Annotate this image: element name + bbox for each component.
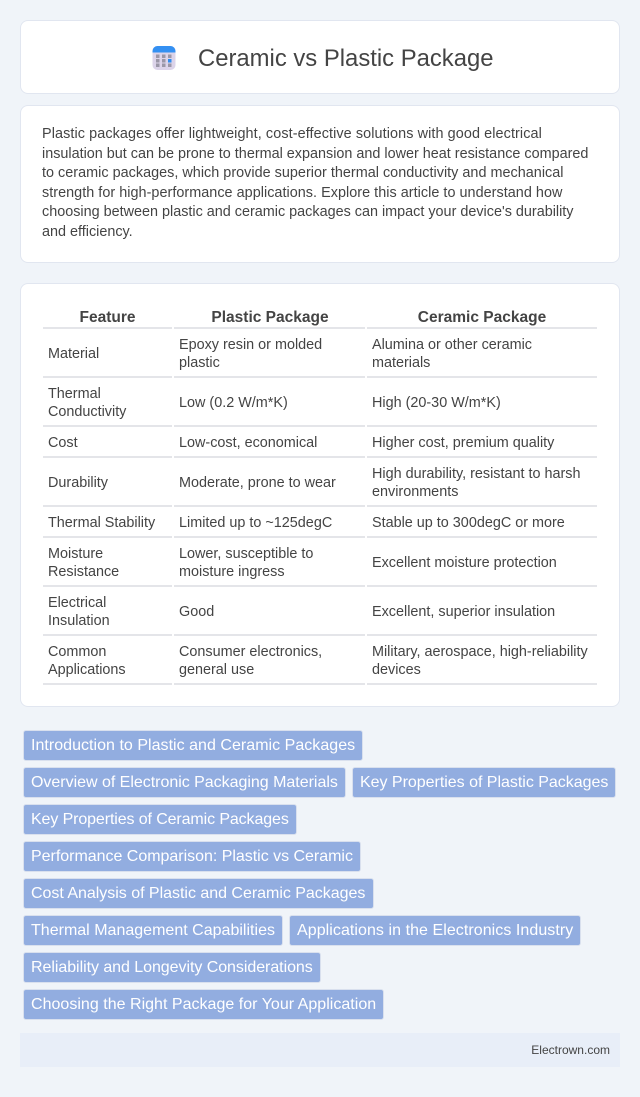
row: material: Epoxy resin or molded [179, 337, 322, 353]
row: electrical insulation: Excellent, superior insulation [372, 604, 555, 620]
footer credit: Electrown.com [531, 1043, 610, 1057]
row: moisture resistance: Resistance [48, 564, 119, 580]
tag: thermal: Thermal Management Capabilities [31, 922, 275, 939]
tag: plastic properties: Key Properties of Plastic Packages [360, 774, 608, 791]
row: material: plastic [179, 355, 220, 371]
row: material [48, 337, 532, 371]
row: common applications: Military, aerospace, high-reliability [372, 644, 588, 660]
tag: introduction: Introduction to Plastic and Ceramic Packages [31, 737, 355, 754]
tag: applications: Applications in the Electronics Industry [297, 922, 573, 939]
tag: plastic properties [352, 767, 616, 798]
tag: overview: Overview of Electronic Packaging Materials [31, 774, 338, 791]
column headers: Plastic Package [211, 309, 329, 326]
intro text: to ceramic packages, which provide superior thermal conductivity and mechanical [42, 165, 564, 181]
row: durability: Durability [48, 475, 108, 491]
intro text: strength for high-performance applications. Explore this article to understand how [42, 184, 562, 200]
row: durability: High durability, resistant to harsh [372, 466, 580, 482]
title: Ceramic vs Plastic Package [198, 45, 494, 72]
row: thermal stability: Thermal Stability [48, 515, 155, 531]
tag: ceramic properties: Key Properties of Ceramic Packages [31, 811, 289, 828]
tag: performance [23, 841, 361, 872]
row: cost [48, 435, 554, 451]
tag: choosing: Choosing the Right Package for Your Application [31, 996, 376, 1013]
row: durability: Moderate, prone to wear [179, 475, 336, 491]
row: electrical insulation: Good [179, 604, 214, 620]
tag: performance: Performance Comparison: Plastic vs Ceramic [31, 848, 353, 865]
intro text: choosing between plastic and ceramic packages can impact your device's durability [42, 204, 573, 220]
row: common applications [48, 644, 588, 678]
row: thermal stability [48, 515, 565, 531]
row: cost: Cost [48, 435, 78, 451]
row: thermal conductivity: High (20-30 W/m*K) [372, 395, 501, 411]
row: common applications: Common [48, 644, 106, 660]
row: thermal stability: Limited up to ~125degC [179, 515, 332, 531]
tag: reliability [23, 952, 321, 983]
tag: introduction [23, 730, 363, 761]
intro text [42, 126, 588, 240]
row: electrical insulation: Insulation [48, 613, 110, 629]
header panel [20, 20, 620, 94]
column headers: Feature [80, 309, 136, 326]
intro text: insulation but can be prone to thermal expansion and lower heat resistance compared [42, 146, 588, 162]
row: moisture resistance: Moisture [48, 546, 103, 562]
tag: applications [289, 915, 581, 946]
tag: reliability: Reliability and Longevity Considerations [31, 959, 313, 976]
intro text: Plastic packages offer lightweight, cost-effective solutions with good electrical [42, 126, 542, 142]
row: material: Material [48, 346, 99, 362]
column headers [80, 309, 546, 326]
tag list [23, 730, 616, 1020]
tag: overview [23, 767, 346, 798]
icon: calendar [152, 46, 176, 70]
panel: introduction [20, 105, 620, 263]
footer [20, 1033, 620, 1067]
row: durability: environments [372, 484, 458, 500]
row: electrical insulation [48, 595, 555, 629]
row: durability [48, 466, 580, 500]
tag: ceramic properties [23, 804, 297, 835]
row: common applications: Applications [48, 662, 126, 678]
row: moisture resistance: moisture ingress [179, 564, 285, 580]
row: material: materials [372, 355, 430, 371]
intro text: and efficiency. [42, 224, 133, 240]
tag: choosing [23, 989, 384, 1020]
row: thermal conductivity: Conductivity [48, 404, 126, 420]
row: cost: Low-cost, economical [179, 435, 317, 451]
row: common applications: Consumer electronics, [179, 644, 322, 660]
row: moisture resistance: Lower, susceptible to [179, 546, 313, 562]
row: thermal conductivity: Low (0.2 W/m*K) [179, 395, 288, 411]
row: cost: Higher cost, premium quality [372, 435, 554, 451]
tag: cost [23, 878, 374, 909]
row: electrical insulation: Electrical [48, 595, 106, 611]
row: moisture resistance [48, 546, 557, 580]
row: moisture resistance: Excellent moisture protection [372, 555, 557, 571]
row: common applications: general use [179, 662, 254, 678]
tag: cost: Cost Analysis of Plastic and Ceramic Packages [31, 885, 365, 902]
row: thermal conductivity [48, 386, 501, 420]
panel: comparison table [20, 283, 620, 707]
row: material: Alumina or other ceramic [372, 337, 532, 353]
tag: thermal [23, 915, 283, 946]
row: thermal conductivity: Thermal [48, 386, 101, 402]
row: common applications: devices [372, 662, 421, 678]
column headers: Ceramic Package [418, 309, 546, 326]
row: thermal stability: Stable up to 300degC or more [372, 515, 565, 531]
